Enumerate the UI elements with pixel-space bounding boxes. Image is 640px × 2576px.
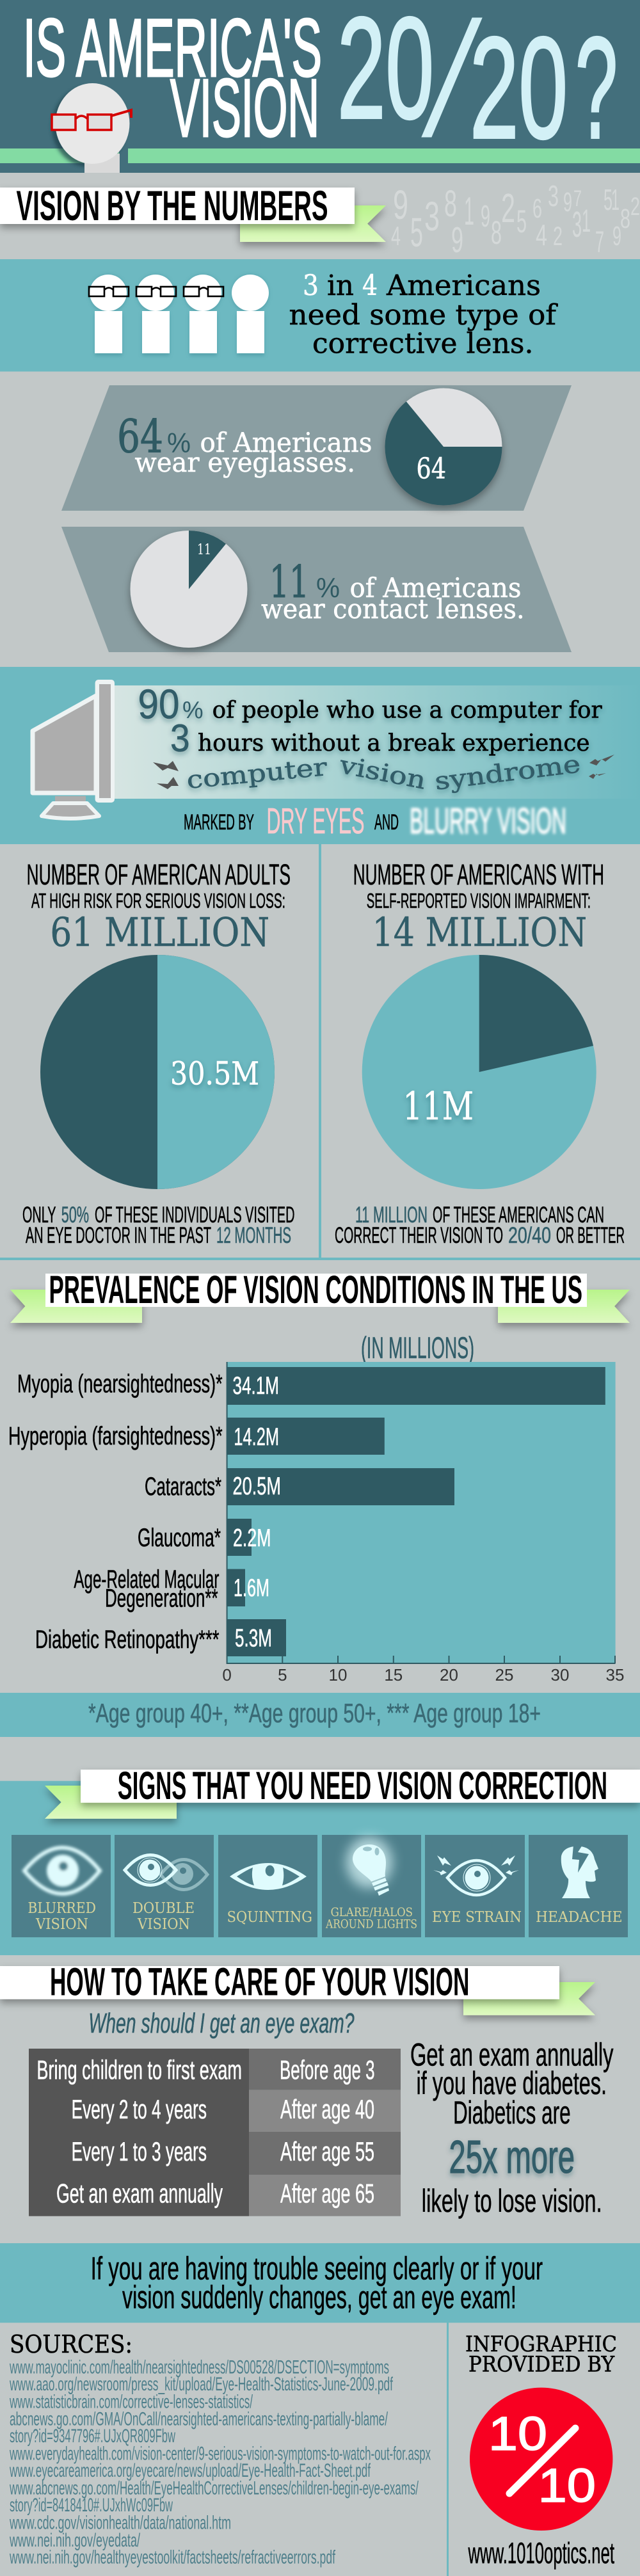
table: eye exam schedule [29, 2049, 401, 2216]
text: computer vision syndrome: computer [186, 753, 329, 794]
text: 3 in 4 americans need some type of corrective lens: Americans [386, 269, 541, 302]
scattered numbers decoration: 1 [611, 183, 620, 216]
scattered numbers decoration: 8 [491, 214, 502, 251]
source list [9, 2356, 431, 2568]
tile: squinting: SQUINTING [227, 1909, 312, 1926]
section heading: vision by the numbers: VISION BY THE NUMBERS [17, 182, 328, 229]
panel: 3 in 4 americans [0, 259, 640, 371]
text: marked by dry eyes and blurry vision: AND [374, 810, 399, 835]
scattered numbers decoration: 5 [516, 204, 527, 239]
bar value labels: 1.6M [234, 1574, 269, 1602]
scattered numbers decoration: 1 [582, 203, 591, 239]
panel: 64% wear eyeglasses [61, 385, 572, 511]
source list: www.statisticbrain.com/corrective-lenses-statistics/ [9, 2391, 253, 2412]
panel: 11% wear contact lenses [61, 527, 572, 652]
text: 90% of people who use a computer for 3 hours: hours without a break experience [198, 730, 590, 756]
source list: story?id=9347796#.UJxQR809Fbw [10, 2426, 175, 2447]
scattered numbers decoration: 9 [451, 220, 463, 260]
text: computer vision syndrome: syndrome [433, 749, 582, 796]
column divider [447, 2323, 449, 2576]
scattered numbers decoration: 5 [604, 183, 612, 216]
section rule [0, 1258, 640, 1260]
bar value labels [233, 1372, 281, 1652]
icon: computer monitor [33, 680, 115, 819]
callout: diabetes exam advice: Diabetics are [453, 2095, 571, 2131]
tile: blurred vision: BLURRED [28, 1900, 96, 1917]
text: computer vision syndrome [186, 749, 582, 796]
category labels: Diabetic Retinopathy*** [35, 1626, 219, 1654]
panel: computer vision syndrome [0, 667, 640, 844]
text: only 50% visited an eye doctor: 12 MONTHS [216, 1223, 291, 1248]
tile: headache [529, 1835, 628, 1937]
scattered numbers decoration: 7 [573, 186, 582, 211]
pie chart: 11M of 14M: 11M [403, 1084, 474, 1129]
axis tick labels: 25 [495, 1665, 513, 1684]
axis tick labels: 15 [384, 1665, 403, 1684]
bar value labels: 20.5M [233, 1473, 281, 1500]
axis tick labels: 10 [329, 1665, 347, 1684]
bar chart: vision conditions [8, 1362, 624, 1684]
footnote strip: age groups [0, 1693, 640, 1737]
logo: 10/10: 10 [538, 2459, 596, 2512]
pie chart: 30.5M of 61M: 30.5M [170, 1055, 259, 1092]
main title: 20/20? [337, 0, 618, 168]
category labels: Degeneration** [105, 1585, 218, 1613]
text: 11 million can correct to 20/40: 20/40 [508, 1223, 551, 1248]
text: marked by dry eyes and blurry vision: MARKED BY [184, 810, 254, 835]
category labels: Glaucoma* [138, 1524, 221, 1552]
axis tick labels: 0 [222, 1665, 232, 1684]
icon: head with red glasses [52, 83, 131, 173]
tile: headache: HEADACHE [536, 1909, 623, 1926]
scattered numbers decoration [391, 179, 640, 260]
icon: blurred eye [24, 1848, 100, 1894]
main title: is america's vision: IS AMERICA'S [23, 3, 322, 94]
text: only 50% visited an eye doctor: ONLY [22, 1203, 56, 1228]
text: 90% of people who use a computer for 3 hours: 90 [138, 680, 179, 727]
section heading: how to take care of your vision [0, 1960, 595, 2015]
panel: sources [9, 2330, 431, 2568]
panel: self-reported vision impairment [335, 858, 625, 1248]
scattered numbers decoration: 4 [391, 221, 401, 251]
axis tick labels: 30 [551, 1665, 569, 1684]
icon: lightning sparks [153, 755, 614, 789]
tile: squinting [218, 1835, 317, 1937]
text: 90% of people who use a computer for 3 hours [138, 680, 602, 760]
text: 64% of americans wear eyeglasses [117, 410, 372, 478]
source list: www.nei.nih.gov/eyedata/ [9, 2530, 140, 2551]
scattered numbers decoration: 7 [595, 225, 604, 259]
callout: diabetes exam advice [410, 2036, 613, 2219]
bars [227, 1367, 605, 1656]
tile: blurred vision [12, 1835, 111, 1937]
category labels: Cataracts* [145, 1473, 221, 1501]
subheading: when should i get an eye exam: When should I get an eye exam? [88, 2008, 355, 2039]
panel: infographic provided by 10/10 optics: PROVIDED BY [468, 2352, 615, 2378]
section heading: vision by the numbers [0, 182, 386, 242]
icon: head with lightning bolt [561, 1845, 598, 1898]
scattered numbers decoration: 3 [424, 193, 440, 239]
logo: 10/10 [470, 2388, 612, 2531]
tile: double vision: DOUBLE [132, 1900, 195, 1917]
text: 3 in 4 americans need some type of corrective lens: need some type of [289, 299, 558, 332]
icon: strained eye with sparks [433, 1855, 519, 1895]
source list: www.eyecareamerica.org/eyecare/news/upload/Eye-Health-Fact-Sheet.pdf [9, 2460, 371, 2481]
table: eye exam schedule: Every 2 to 4 years [72, 2094, 207, 2124]
source list: story?id=8418410#.UJxhWc09Fbw [10, 2495, 173, 2516]
tile: blurred vision: VISION [35, 1916, 88, 1933]
text: 3 in 4 americans need some type of corrective lens: in [327, 269, 354, 302]
pie chart: 11M of 14M [362, 955, 596, 1189]
text: marked by dry eyes and blurry vision [184, 801, 566, 842]
text: 11 million can correct to 20/40: CORRECT THEIR VISION TO [335, 1223, 503, 1248]
text: 11% of americans wear contact lenses: of Americans [349, 572, 521, 604]
banner: get an eye exam [0, 2243, 640, 2323]
text: only 50% visited an eye doctor: 50% [61, 1203, 89, 1228]
text: only 50% visited an eye doctor [22, 1203, 294, 1248]
scattered numbers decoration: 2 [501, 185, 515, 231]
logo: 10/10: 10 [488, 2407, 547, 2460]
table: eye exam schedule: After age 55 [280, 2136, 374, 2166]
chart subtitle: in millions: (IN MILLIONS) [361, 1331, 474, 1364]
text: 90% of people who use a computer for 3 hours: of people who use a computer for [212, 698, 602, 724]
text: 64% of americans wear eyeglasses: wear eyeglasses. [134, 447, 355, 478]
category labels: Hyperopia (farsightedness)* [8, 1422, 223, 1450]
tile: glare and halos [322, 1835, 421, 1937]
text: 90% of people who use a computer for 3 hours: % [182, 697, 204, 724]
axis and ticks [227, 1362, 616, 1663]
main title: is america's vision: VISION [170, 63, 319, 154]
text: 11 million can correct to 20/40 [335, 1203, 625, 1248]
icon: double eye [125, 1855, 207, 1889]
text: marked by dry eyes and blurry vision: DRY EYES [266, 801, 365, 842]
text: 3 in 4 americans need some type of corrective lens [289, 269, 558, 360]
category labels: Myopia (nearsightedness)* [17, 1370, 223, 1398]
category labels: Age-Related Macular [74, 1565, 219, 1594]
panel: infographic provided by 10/10 optics: INFOGRAPHIC [465, 2332, 617, 2357]
bar value labels: 5.3M [235, 1625, 272, 1652]
panel: infographic provided by 10/10 optics [465, 2332, 617, 2570]
tile: glare and halos: AROUND LIGHTS [325, 1917, 417, 1932]
scattered numbers decoration: 4 [536, 218, 547, 252]
section heading: signs you need vision correction [45, 1764, 640, 1819]
bar value labels: 2.2M [233, 1524, 271, 1552]
text: 3 in 4 americans need some type of corrective lens: corrective lens. [312, 328, 534, 360]
pie chart: 64 percent: 64 [416, 452, 446, 486]
text: 64% of americans wear eyeglasses: 64 [117, 410, 163, 463]
table: eye exam schedule: After age 40 [280, 2094, 374, 2124]
heading: number of americans with [353, 858, 604, 956]
axis tick labels: 35 [606, 1665, 624, 1684]
heading: number of american adults: 61 MILLION [50, 909, 269, 956]
heading: number of american adults: AT HIGH RISK FOR SERIOUS VISION LOSS: [31, 890, 285, 913]
tile: glare and halos: GLARE/HALOS [331, 1905, 413, 1919]
tile: double vision: VISION [137, 1916, 190, 1933]
text: 11 million can correct to 20/40: 11 MILLION [355, 1203, 428, 1228]
table: eye exam schedule: Bring children to first exam [36, 2054, 242, 2084]
text: 11% of americans wear contact lenses [261, 557, 525, 625]
panel: sources: SOURCES: [10, 2330, 132, 2358]
text: 90% of people who use a computer for 3 hours: 3 [170, 717, 190, 760]
text: 64% of americans wear eyeglasses: of Americans [200, 427, 372, 458]
scattered numbers decoration: 3 [548, 179, 559, 212]
bar value labels: 14.2M [234, 1423, 279, 1451]
bar value labels: 34.1M [233, 1372, 279, 1400]
icon: four people, three wearing glasses [89, 275, 269, 356]
column divider [319, 844, 321, 1258]
scattered numbers decoration: 1 [464, 189, 474, 234]
text: 3 in 4 americans need some type of corrective lens: 3 [303, 269, 319, 302]
pie chart: 30.5M of 61M [40, 955, 275, 1189]
axis tick labels: 20 [440, 1665, 458, 1684]
text: 11% of americans wear contact lenses: 11 [269, 557, 309, 608]
header band [0, 0, 640, 173]
scattered numbers decoration: 9 [481, 200, 490, 234]
scattered numbers decoration: 5 [410, 209, 423, 255]
category labels [8, 1370, 223, 1654]
pie chart: 64 percent [385, 388, 502, 506]
heading: number of american adults [27, 858, 291, 956]
scattered numbers decoration: 8 [620, 204, 630, 234]
scattered numbers decoration: 3 [572, 204, 582, 245]
scattered numbers decoration: 2 [553, 221, 563, 251]
callout: diabetes exam advice: 25x more [449, 2132, 575, 2183]
main title: is america's vision [23, 3, 322, 154]
panel: signs that you need vision correction [0, 1764, 640, 1955]
axis tick labels: 5 [278, 1665, 287, 1684]
axis tick labels [222, 1665, 624, 1684]
panel: adults at high risk [22, 858, 294, 1248]
icon: glowing light bulb [346, 1837, 392, 1896]
pie chart: 11 percent: 11 [197, 542, 211, 558]
text: only 50% visited an eye doctor: OF THESE INDIVIDUALS VISITED [95, 1203, 294, 1228]
source list: www.cdc.gov/visionhealth/data/national.htm [9, 2513, 231, 2534]
text: 11% of americans wear contact lenses: wear contact lenses. [261, 593, 525, 625]
tile: eye strain [425, 1835, 525, 1937]
tile: double vision [115, 1835, 214, 1937]
scattered numbers decoration: 9 [393, 182, 408, 228]
table: eye exam schedule: Every 1 to 3 years [72, 2136, 207, 2166]
source list: www.nei.nih.gov/healthyeyestoolkit/factsheets/refractiveerrors.pdf [9, 2547, 335, 2568]
text: only 50% visited an eye doctor: AN EYE DOCTOR IN THE PAST [26, 1223, 211, 1248]
text: 3 in 4 americans need some type of corrective lens: 4 [362, 269, 378, 302]
text: 11% of americans wear contact lenses: % [316, 572, 340, 604]
icon: squinting eye [230, 1863, 307, 1890]
scattered numbers decoration: 9 [612, 221, 621, 252]
tile: eye strain: EYE STRAIN [432, 1909, 522, 1926]
scattered numbers decoration: 9 [563, 187, 572, 218]
table: eye exam schedule: Get an exam annually [56, 2179, 223, 2209]
table: eye exam schedule: After age 65 [280, 2179, 374, 2209]
main title: 20/20?: 20 [470, 7, 568, 168]
heading: number of americans with: 14 MILLION [372, 909, 587, 956]
text: 64% of americans wear eyeglasses: % [167, 428, 191, 459]
pie chart: 11 percent [131, 531, 247, 648]
heading: number of american adults: NUMBER OF AMERICAN ADULTS [27, 858, 291, 891]
scattered numbers decoration: 8 [444, 183, 457, 225]
scattered numbers decoration: 6 [532, 193, 542, 224]
text: computer vision syndrome: vision [337, 750, 428, 795]
table: eye exam schedule: Before age 3 [280, 2054, 375, 2084]
